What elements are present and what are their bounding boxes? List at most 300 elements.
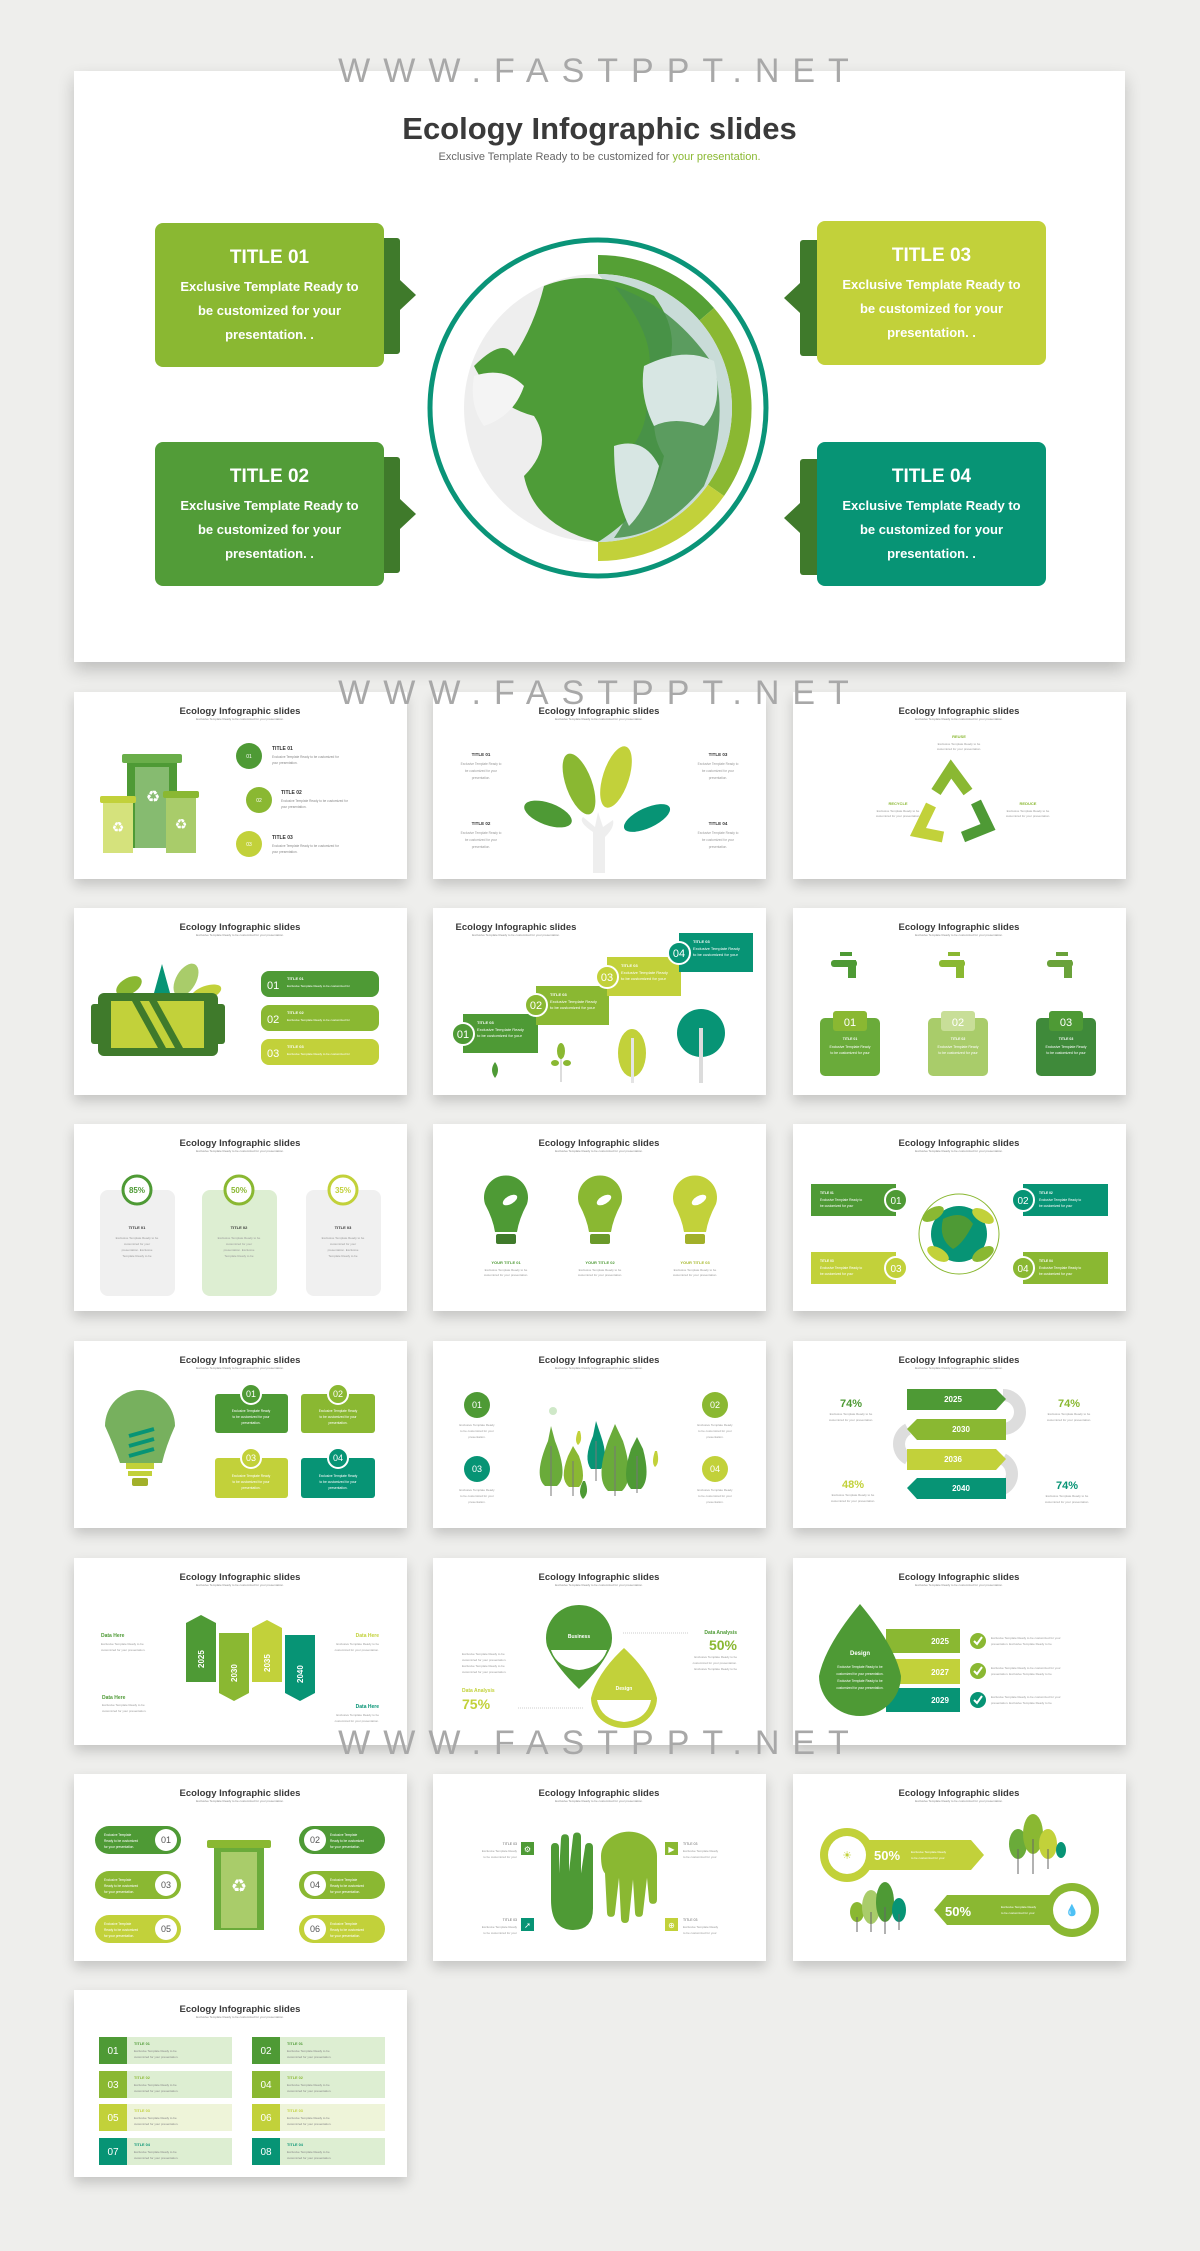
faucets and boxes: TITLE 03 <box>1059 1037 1073 1041</box>
icon boxes: ▶ <box>668 1845 675 1854</box>
list items: Exclusive Template Ready to be customized for <box>272 844 340 848</box>
boxes: TITLE 03 <box>820 1259 834 1263</box>
box: title 02: be customized for your <box>198 522 341 537</box>
data analysis: customized for your presentation. <box>462 1658 507 1662</box>
box: title 02: TITLE 02 <box>230 466 309 487</box>
icon: recycle <box>918 769 988 837</box>
slide: faucets <box>793 908 1126 1095</box>
cards: Exclusive Template Ready to be <box>116 1236 159 1240</box>
rows: Exclusive Template Ready to be <box>134 2116 177 2120</box>
arrow 2: Exclusive Template Ready <box>1001 1905 1037 1909</box>
icon: trash bin <box>207 1840 271 1930</box>
heading: Ecology Infographic slides <box>456 922 576 933</box>
steps: to be customized for your <box>477 1033 523 1038</box>
rows: TITLE 04 <box>134 2143 151 2147</box>
pointer 04 <box>784 503 800 533</box>
arrow 2 <box>934 1883 1099 1937</box>
steps: Exclusive Template Ready <box>477 1027 524 1032</box>
box: title 03: Exclusive Template Ready to <box>842 277 1021 292</box>
cards: customized for your <box>330 1242 356 1246</box>
box: title 03: be customized for your <box>860 301 1003 316</box>
percentages: 74% <box>840 1398 862 1410</box>
boxes: 01 <box>246 1389 256 1399</box>
icon: battery with leaves <box>91 959 225 1056</box>
arrow 2: 50% <box>945 1904 971 1919</box>
numbered items: presentation. <box>468 1500 486 1504</box>
boxes <box>811 1184 1108 1284</box>
heading: Exclusive Template Ready to be customized for your presentation. <box>915 1583 1003 1587</box>
boxes: Exclusive Template Ready to <box>1039 1266 1081 1270</box>
data analysis: Data Analysis <box>704 1630 737 1636</box>
heading: Exclusive Template Ready to be customized for your presentation. <box>196 1149 284 1153</box>
checks: Exclusive Template Ready to be customized for your <box>991 1666 1061 1670</box>
list items: your presentation. <box>281 805 307 809</box>
pills: 02 <box>310 1835 320 1845</box>
pointer 01 <box>400 280 416 310</box>
heading: Exclusive Template Ready to be customized for your presentation. <box>196 1583 284 1587</box>
slide: leaves hand <box>433 692 766 879</box>
boxes: Exclusive Template Ready to <box>820 1266 862 1270</box>
tab 04 <box>800 459 820 575</box>
steps: to be customized for your <box>621 976 667 981</box>
arrows: 2035 <box>263 1654 272 1672</box>
bars: TITLE 01 <box>287 976 304 981</box>
texts <box>461 752 739 849</box>
box: title 03: TITLE 03 <box>892 245 971 266</box>
arrows: 2025 <box>944 1395 962 1404</box>
labels: YOUR TITLE 01 <box>491 1260 521 1265</box>
rows: TITLE 03 <box>287 2109 303 2113</box>
heading: Ecology Infographic slides <box>899 1788 1019 1799</box>
texts: TITLE 04 <box>709 821 728 826</box>
steps: 04 <box>673 948 685 960</box>
labels: Exclusive Template Ready to be <box>938 742 981 746</box>
data labels: customized for your presentation. <box>335 1648 379 1652</box>
heading: Exclusive Template Ready to be customized for your presentation. <box>555 717 643 721</box>
pills: for your presentation. <box>104 1890 134 1894</box>
arrow 2: to be customized for your <box>1001 1911 1035 1915</box>
watermark top: WWW.FASTPPT.NET <box>338 52 862 90</box>
bars: 02 <box>267 1014 279 1026</box>
cards: 85% <box>129 1186 145 1195</box>
checks <box>970 1633 1061 1708</box>
numbered items: Exclusive Template Ready <box>459 1423 495 1427</box>
texts: Exclusive Template Ready to <box>461 762 502 766</box>
slide: numbered list <box>74 1990 407 2177</box>
data analysis: Exclusive Template Ready to be <box>462 1664 505 1668</box>
box: title 01: TITLE 01 <box>230 247 309 268</box>
icon boxes: ⚙ <box>524 1845 531 1854</box>
faucets and boxes <box>820 952 1096 1076</box>
texts: be customized for your <box>465 769 498 773</box>
steps: 02 <box>530 1000 542 1012</box>
pointer 02 <box>400 499 416 529</box>
heading: Ecology Infographic slides <box>180 706 300 717</box>
boxes: Exclusive Template Ready to <box>820 1198 862 1202</box>
pills: 05 <box>161 1924 171 1934</box>
data analysis <box>462 1630 738 1712</box>
pills: 01 <box>161 1835 171 1845</box>
faucets and boxes: 03 <box>1060 1017 1072 1029</box>
icon boxes <box>482 1842 719 1935</box>
box: title 04 <box>817 442 1046 586</box>
numbered items: to be customized for your <box>698 1429 732 1433</box>
arrow 1: ☀ <box>842 1850 852 1862</box>
labels: Exclusive Template Ready to be <box>1007 809 1050 813</box>
boxes: to be customized for your <box>232 1480 270 1484</box>
labels: YOUR TITLE 03 <box>680 1260 710 1265</box>
checks: presentation. Exclusive Template Ready to be <box>991 1701 1052 1705</box>
icon: drop: Design <box>850 1651 870 1657</box>
pills: Ready to be customized <box>330 1839 364 1843</box>
boxes: presentation. <box>328 1486 348 1490</box>
percentages: 48% <box>842 1479 864 1491</box>
data analysis: 75% <box>462 1696 491 1712</box>
steps: TITLE 03 <box>693 939 710 944</box>
icon: drop: Exclusive Template Ready to be <box>837 1665 883 1669</box>
rows: customized for your presentation. <box>134 2156 179 2160</box>
arrow 1: to be customized for your <box>911 1856 945 1860</box>
year bars: 2027 <box>931 1668 949 1677</box>
rows: Exclusive Template Ready to be <box>287 2049 330 2053</box>
steps: TITLE 03 <box>477 1020 494 1025</box>
boxes: be customized for your <box>820 1204 854 1208</box>
heading: Exclusive Template Ready to be customized for your presentation. <box>915 1149 1003 1153</box>
box: title 01: presentation. . <box>225 327 314 342</box>
pills: Exclusive Template <box>104 1922 131 1926</box>
cards: TITLE 01 <box>129 1225 146 1230</box>
arrows: 2040 <box>952 1484 970 1493</box>
pills: Ready to be customized <box>104 1839 138 1843</box>
cards: TITLE 03 <box>335 1225 352 1230</box>
numbered items: Exclusive Template Ready <box>697 1488 733 1492</box>
pills: Ready to be customized <box>330 1884 364 1888</box>
icon boxes: to be customized for your <box>483 1931 517 1935</box>
numbered items: 02 <box>710 1400 720 1410</box>
boxes: be customized for your <box>1039 1272 1073 1276</box>
faucets and boxes: Exclusive Template Ready <box>938 1045 979 1049</box>
faucets and boxes: 02 <box>952 1017 964 1029</box>
icon: drop <box>819 1604 901 1716</box>
rows: 02 <box>260 2046 272 2057</box>
data labels: Exclusive Template Ready to be <box>102 1703 145 1707</box>
heading: Exclusive Template Ready to be customized for your presentation. <box>555 1366 643 1370</box>
data analysis: Exclusive Template Ready to be <box>462 1652 505 1656</box>
icon: bins <box>100 754 199 853</box>
heading: Ecology Infographic slides <box>539 1355 659 1366</box>
data analysis: 50% <box>709 1637 738 1653</box>
heading: Exclusive Template Ready to be customized for your presentation. <box>196 1799 284 1803</box>
steps: TITLE 03 <box>621 963 638 968</box>
cards: customized for your <box>124 1242 150 1246</box>
box: title 04: TITLE 04 <box>892 466 971 487</box>
texts: TITLE 02 <box>472 821 491 826</box>
checks: presentation. Exclusive Template Ready to be <box>991 1672 1052 1676</box>
icon: plant <box>521 743 674 873</box>
rows: TITLE 04 <box>287 2143 304 2147</box>
rows: customized for your presentation. <box>134 2089 179 2093</box>
cards: presentation. Exclusive <box>224 1248 255 1252</box>
pills: Ready to be customized <box>104 1884 138 1888</box>
boxes: to be customized for your <box>319 1415 357 1419</box>
slide: recycle bins <box>74 692 407 879</box>
icon boxes: ⊕ <box>668 1921 675 1930</box>
labels: customized for your presentation. <box>578 1273 622 1277</box>
icon: trees <box>540 1407 658 1499</box>
box: title 01 <box>155 223 384 367</box>
icon: design drop: Design <box>616 1686 632 1692</box>
faucets and boxes: TITLE 02 <box>951 1037 965 1041</box>
pills: Exclusive Template <box>104 1878 131 1882</box>
icon boxes: Exclusive Template Ready <box>683 1925 719 1929</box>
texts: presentation. <box>472 845 490 849</box>
data labels: customized for your presentation. <box>101 1648 146 1652</box>
labels: Exclusive Template Ready to be <box>485 1268 528 1272</box>
heading: Ecology Infographic slides <box>180 1138 300 1149</box>
pills: for your presentation. <box>330 1845 360 1849</box>
steps <box>452 933 753 1053</box>
icon boxes: TITLE 03 <box>503 1842 517 1846</box>
numbered items: Exclusive Template Ready <box>697 1423 733 1427</box>
numbered items: 04 <box>710 1464 720 1474</box>
texts: presentation. <box>709 776 727 780</box>
icon: drop: Exclusive Template Ready to be <box>837 1679 883 1683</box>
data labels: customized for your presentation. <box>335 1719 379 1723</box>
texts: TITLE 01 <box>472 752 491 757</box>
rows: Exclusive Template Ready to be <box>134 2083 177 2087</box>
boxes <box>215 1384 375 1498</box>
heading: Exclusive Template Ready to be customized for your presentation. <box>915 717 1003 721</box>
faucets and boxes: Exclusive Template Ready <box>1046 1045 1087 1049</box>
boxes: to be customized for your <box>319 1480 357 1484</box>
faucets and boxes: TITLE 01 <box>843 1037 857 1041</box>
data labels <box>101 1633 379 1723</box>
rows: Exclusive Template Ready to be <box>287 2083 330 2087</box>
cards: TITLE 02 <box>231 1225 248 1230</box>
pills: Exclusive Template <box>330 1878 357 1882</box>
rows: Exclusive Template Ready to be <box>287 2150 330 2154</box>
heading: Ecology Infographic slides <box>899 1138 1019 1149</box>
numbered items: Exclusive Template Ready <box>459 1488 495 1492</box>
boxes: Exclusive Template Ready <box>232 1409 271 1413</box>
rows: customized for your presentation. <box>287 2122 332 2126</box>
data labels: Data Here <box>101 1633 125 1639</box>
pills: for your presentation. <box>104 1845 134 1849</box>
heading: Exclusive Template Ready to be customized for your presentation. <box>555 1583 643 1587</box>
boxes: presentation. <box>328 1421 348 1425</box>
icon boxes: ➚ <box>524 1921 531 1930</box>
labels <box>484 1260 717 1277</box>
heading: Exclusive Template Ready to be customized for your presentation. <box>196 933 284 937</box>
rows: 07 <box>107 2147 119 2158</box>
heading: Ecology Infographic slides <box>539 1572 659 1583</box>
tab 01 <box>380 238 400 354</box>
boxes: 04 <box>333 1453 343 1463</box>
data analysis: Data Analysis <box>462 1688 495 1694</box>
tab 03 <box>800 240 820 356</box>
arrows: 2030 <box>230 1664 239 1682</box>
steps: 01 <box>457 1029 469 1041</box>
heading: Ecology Infographic slides <box>180 1572 300 1583</box>
pointer 03 <box>784 283 800 313</box>
percentages: customized for your presentation. <box>829 1418 873 1422</box>
icon boxes: to be customized for your <box>483 1855 517 1859</box>
data labels: Data Here <box>102 1695 126 1701</box>
cards: 35% <box>335 1186 351 1195</box>
boxes: TITLE 02 <box>1039 1191 1053 1195</box>
data analysis: customized for your presentation. <box>462 1670 507 1674</box>
main subtitle: Exclusive Template Ready to be customized for your presentation. <box>438 151 761 163</box>
heading: Exclusive Template Ready to be customized for your presentation. <box>196 717 284 721</box>
pills: Exclusive Template <box>330 1922 357 1926</box>
slide: vertical arrows <box>74 1558 407 1745</box>
rows: TITLE 02 <box>287 2076 303 2080</box>
pills: for your presentation. <box>104 1934 134 1938</box>
data analysis: Exclusive Template Ready to be <box>694 1655 737 1659</box>
box: title 04: Exclusive Template Ready to <box>842 498 1021 513</box>
percentages: customized for your presentation. <box>831 1499 875 1503</box>
labels: customized for your presentation. <box>673 1273 717 1277</box>
texts: be customized for your <box>702 838 735 842</box>
steps: Exclusive Template Ready <box>621 970 668 975</box>
rows: customized for your presentation. <box>287 2156 332 2160</box>
steps: Exclusive Template Ready <box>693 946 740 951</box>
bars: Exclusive Template Ready to be customized for <box>287 984 350 988</box>
labels: REUSE <box>952 734 966 739</box>
bars: 01 <box>267 980 279 992</box>
labels: customized for your presentation. <box>1006 814 1050 818</box>
tab 02 <box>380 457 400 573</box>
pills: 06 <box>310 1924 320 1934</box>
cards: Exclusive Template Ready to be <box>218 1236 261 1240</box>
rows: 06 <box>260 2113 272 2124</box>
slide: timeline arrows <box>793 1341 1126 1528</box>
cards: presentation. Exclusive <box>328 1248 359 1252</box>
data labels: Exclusive Template Ready to be <box>101 1642 144 1646</box>
labels: customized for your presentation. <box>484 1273 528 1277</box>
icon: business pin: Business <box>568 1634 590 1640</box>
checks: Exclusive Template Ready to be customized for your <box>991 1636 1061 1640</box>
data analysis: Exclusive Template Ready to be <box>694 1667 737 1671</box>
numbered items: to be customized for your <box>698 1494 732 1498</box>
list items: TITLE 02 <box>281 790 302 796</box>
checks: Exclusive Template Ready to be customized for your <box>991 1695 1061 1699</box>
labels: Exclusive Template Ready to be <box>579 1268 622 1272</box>
boxes: 01 <box>890 1196 902 1207</box>
heading: Exclusive Template Ready to be customized for your presentation. <box>196 2015 284 2019</box>
rows: 03 <box>107 2080 119 2091</box>
arrows <box>907 1389 1006 1499</box>
year bars <box>886 1629 960 1712</box>
slide: trash with pills <box>74 1774 407 1961</box>
slide: percent cards <box>74 1124 407 1311</box>
cards <box>100 1176 381 1296</box>
icon: drop: customized for your presentation. <box>836 1686 884 1690</box>
percentages: Exclusive Template Ready to be <box>830 1412 873 1416</box>
heading: Exclusive Template Ready to be customized for your presentation. <box>915 933 1003 937</box>
cards: Template Ready to be <box>224 1254 254 1258</box>
heading: Ecology Infographic slides <box>180 1355 300 1366</box>
bars: TITLE 02 <box>287 1010 304 1015</box>
icon: business pin <box>546 1605 612 1689</box>
icon: globe <box>919 1194 999 1274</box>
slide: 50% arrows with trees <box>793 1774 1126 1961</box>
percentages: Exclusive Template Ready to be <box>832 1493 875 1497</box>
list items: your presentation. <box>272 850 298 854</box>
bars <box>261 971 379 1065</box>
boxes: 04 <box>1017 1264 1029 1275</box>
heading: Exclusive Template Ready to be customized for your presentation. <box>915 1366 1003 1370</box>
pills: Ready to be customized <box>104 1928 138 1932</box>
heading: Ecology Infographic slides <box>539 1138 659 1149</box>
arrows <box>186 1615 315 1701</box>
trees <box>850 1814 1066 1934</box>
arrow 1: Exclusive Template Ready <box>911 1850 947 1854</box>
icon: bins: ♻ <box>175 816 187 832</box>
numbered items: to be customized for your <box>460 1429 494 1433</box>
boxes: 02 <box>333 1389 343 1399</box>
heading: Ecology Infographic slides <box>180 922 300 933</box>
main slide <box>74 71 1125 662</box>
pills: 03 <box>161 1880 171 1890</box>
percentages: 74% <box>1056 1480 1078 1492</box>
slide: globe with boxes <box>793 1124 1126 1311</box>
boxes: Exclusive Template Ready <box>319 1474 358 1478</box>
numbered items: presentation. <box>706 1500 724 1504</box>
icon: bulb <box>105 1390 175 1486</box>
arrows: 2036 <box>944 1455 962 1464</box>
rows: 01 <box>107 2046 119 2057</box>
rows: 04 <box>260 2080 272 2091</box>
pills: Exclusive Template <box>330 1833 357 1837</box>
labels <box>876 734 1050 818</box>
labels: YOUR TITLE 02 <box>585 1260 615 1265</box>
data analysis: customized for your presentation. <box>693 1661 737 1665</box>
icon boxes: TITLE 03 <box>683 1918 697 1922</box>
box: title 01: Exclusive Template Ready to <box>180 279 359 294</box>
faucets and boxes: to be customized for your <box>1046 1051 1086 1055</box>
icon: bins: ♻ <box>112 819 124 835</box>
heading: Ecology Infographic slides <box>899 706 1019 717</box>
slide: steps <box>433 908 766 1095</box>
heading: Ecology Infographic slides <box>899 1355 1019 1366</box>
percentages <box>829 1398 1091 1504</box>
pills: Exclusive Template <box>104 1833 131 1837</box>
steps: TITLE 03 <box>550 992 567 997</box>
data labels: customized for your presentation. <box>102 1709 147 1713</box>
heading: Exclusive Template Ready to be customized for your presentation. <box>555 1149 643 1153</box>
slide: business design <box>433 1558 766 1745</box>
data labels: Data Here <box>356 1633 379 1639</box>
steps: Exclusive Template Ready <box>550 999 597 1004</box>
texts: be customized for your <box>465 838 498 842</box>
watermark middle: WWW.FASTPPT.NET <box>338 674 862 712</box>
rows: customized for your presentation. <box>134 2122 179 2126</box>
year bars: 2025 <box>931 1637 949 1646</box>
heading: Ecology Infographic slides <box>539 1788 659 1799</box>
icon: drop: customized for your presentation. <box>836 1672 884 1676</box>
pills: for your presentation. <box>330 1890 360 1894</box>
watermark lower: WWW.FASTPPT.NET <box>338 1724 862 1762</box>
boxes: Exclusive Template Ready <box>232 1474 271 1478</box>
faucets and boxes: 01 <box>844 1017 856 1029</box>
list items: TITLE 01 <box>272 746 293 752</box>
heading: Ecology Infographic slides <box>539 706 659 717</box>
icon: bins: ♻ <box>146 789 160 806</box>
pills: 04 <box>310 1880 320 1890</box>
boxes: be customized for your <box>1039 1204 1073 1208</box>
texts: Exclusive Template Ready to <box>698 762 739 766</box>
